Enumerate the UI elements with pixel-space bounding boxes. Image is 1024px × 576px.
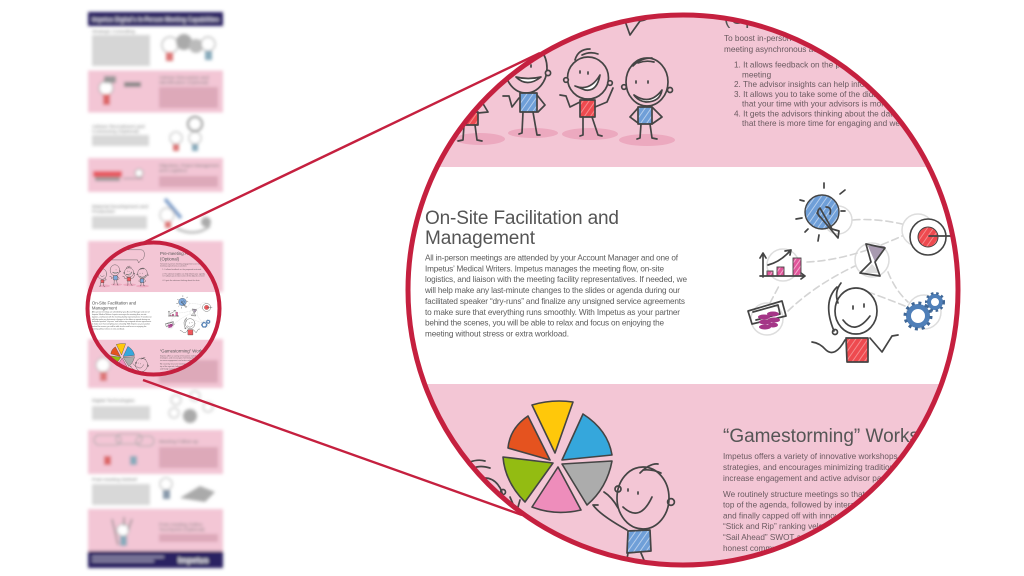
thumbnail section: workshops band [88,339,223,388]
gamestorming body text: and finally capped off with innovative exercises [723,512,893,521]
gamestorming body text: Impetus offers a variety of innovative workshops and strategies, [723,452,954,461]
illustration: dashed connectors and halos [751,206,941,335]
illustration: speech bubble [458,0,655,35]
illustration: money and coins [748,301,786,330]
thumbnail section: digital technologies [92,391,213,423]
on-site body text: All in-person meetings are attended by your Account Manager and one of [425,254,679,262]
thumbnail header bar: Impetus Digital's In-Person Meeting Capabilities [92,18,220,24]
on-site body text: Impetus’ Medical Writers. Impetus manages the meeting flow, on-site [425,264,664,273]
illustration: bar chart [760,250,805,279]
pre-meeting text block: meeting [742,70,772,80]
illustration: figure holding pie wedge [593,464,674,565]
on-site body text: meeting without stress or extra workload. [425,330,569,338]
pre-meeting text block: To boost in-person meeting engagement, we recommend [724,34,932,43]
thumbnail section: advisor discussion [88,70,223,112]
gamestorming body text [723,453,898,551]
magnified circle [408,0,1000,576]
pre-meeting text block: meeting asynchronous activities: [724,45,842,54]
large circle ring [408,15,958,565]
on-site body text: will help make any last-minute changes to the slides or agenda during our [424,286,680,295]
thumbnail section: material development: Production [92,209,115,215]
pre-meeting text block [724,20,900,128]
pre-meeting text block: that there is more time for engaging and well-thought discussion [742,119,975,128]
small circle zoomed content: meeting without stress or extra workload. [92,327,125,330]
pre-meeting text block: 2. The advisor insights can help inform your agenda [734,80,922,89]
small circle zoomed content: logistics, and liaison with the meeting facility representatives. If needed, we [92,315,152,318]
small circle zoomed content: Impetus’ Medical Writers. Impetus manages the meeting flow, on-site [92,313,146,316]
thumbnail section: pre-meeting band [88,241,223,292]
pre-meeting text block: 1. It allows feedback on the proposed materials before the [734,60,945,70]
small circle zoomed content: to make sure that everything runs smoothly. With Impetus as your partner [92,323,150,326]
small circle ring [88,242,220,374]
thumbnail section: project management [88,158,223,192]
illustration: pie chart wedges [503,401,612,512]
thumbnail section: project management: Objectives, Project Management [159,163,220,169]
pre-meeting text block: (Optional) [724,8,807,29]
heading: On-Site Facilitation and Management: Management [425,228,536,249]
thumbnail section: strategic consulting: Strategic Consulting [92,29,135,35]
heading: On-Site Facilitation and Management: On-Site Facilitation and [425,208,619,229]
small circle zoomed content: On-Site Facilitation and [92,301,137,306]
thumbnail section: strategic consulting [92,29,215,66]
small circle zoomed content: strategies, and encourages minimizing traditional lectures to [160,357,209,360]
thumbnail section: online touchpoint [88,509,223,551]
thumbnail section: online touchpoint: Post-meeting Online [159,522,203,528]
thumbnail section: meeting follow-up [88,430,223,474]
small circle zoomed content: (Optional) [160,257,180,262]
pre-meeting text block: 3. It allows you to take some of the didactic content offline so [734,90,955,99]
small circle zoomed content: “Gamestorming” Workshops [160,349,214,354]
small circle zoomed content: 1. It allows feedback on the proposed materials [162,268,201,271]
illustration: shrugging figure [812,283,898,362]
thumbnail section: material development [92,199,211,233]
small circle zoomed content: top of the agenda, followed by interactive discussion [160,365,203,368]
gamestorming body text: honest communication [723,544,805,553]
thumbnail section: online touchpoint: Touchpoint (Optional) [159,527,205,533]
small circle zoomed content: Management [92,305,118,310]
small circle zoomed content: All in-person meetings are attended by your Account Manager and one of [92,311,150,314]
small circle background [92,292,216,340]
small circle zoomed content: Pre-meeting Activities [160,251,202,256]
circle background bands [427,18,939,562]
on-site body text: logistics, and liaison with the meeting facility representatives. If needed, we [425,275,687,284]
gamestorming body text: increase engagement and active advisor participation. [723,474,919,483]
small circle zoomed content: 2. The advisor insights can help inform your agenda [162,272,206,275]
thumbnail footer with logo [88,551,223,568]
thumbnail section: material development: Material Development and [92,204,148,210]
thumbnail section: project management: and Logistics [159,168,188,174]
small circle zoomed content: meeting asynchronous activities: [160,265,187,268]
on-site body text: behind the scenes, you will be able to relax and focus on enjoying the [425,319,664,328]
small circle zoomed content [92,244,216,372]
on-site body text: facilitated speaker “dry-runs” and finalize any unsigned service agreements [425,297,685,306]
thumbnail section: post-meeting debrief [92,477,215,505]
thumbnail section: post-meeting debrief: Post-meeting Debrief [92,477,138,483]
small circle zoomed content: and finally capped off with innovative exercises [160,367,199,370]
on-site body text: to make sure that everything runs smoothly. With Impetus as your partner [425,308,680,317]
pre-meeting text block: that your time with your advisors is more interactive [742,100,929,108]
small circle zoomed content: will help make any last-minute changes to the slides or agenda during our [92,318,150,321]
illustration: hourglass [860,244,885,276]
heading: Gamestorming Workshops: “Gamestorming” Workshops [723,426,960,447]
small circle zoomed content: Impetus offers a variety of innovative workshops and strategies, [160,354,213,357]
thumbnail section: meeting follow-up: Meeting Follow-up [159,439,199,445]
thumbnail section: advisor discussion: Identification (Optional) [159,80,209,86]
thumbnail section: advisor recruitment: Contracting (Optional) [92,129,139,135]
gamestorming body text: strategies, and encourages minimizing traditional lectures to [723,463,941,472]
on-site body text [424,254,687,338]
small circle zoomed content: facilitated speaker “dry-runs” and finalize any unsigned service agreements [92,320,151,323]
blurred infographic thumbnail [88,12,223,568]
small circle zoomed content: 4. It gets the advisors thinking about the data [162,279,200,282]
small circle zoomed content: To boost in-person meeting engagement, we recommend [160,262,207,265]
thumbnail section: advisor discussion: Advisor Discussion and [159,75,209,81]
gamestorming body text: We routinely structure meetings so that key topics are at the [723,490,941,499]
gamestorming body text: “Sail Ahead” SWOT analysis [723,533,826,542]
illustration: four smiling stick figures [450,43,675,146]
illustration: target [910,219,952,255]
small focus circle on thumbnail [85,240,225,380]
illustration: partly hidden figure behind pie [470,459,521,508]
thumbnail section: digital technologies: Digital Technologies [92,398,135,404]
pre-meeting text block: 4. It gets the advisors thinking about the data to be discussed so [734,110,967,118]
connector lines between small and large circle [143,53,540,515]
thumbnail section: advisor recruitment [92,117,202,151]
illustration: lightbulb with pencil [796,183,845,241]
gamestorming body text: “Stick and Rip” ranking velcro boards [723,522,857,531]
small circle zoomed content: 3. It allows you to take some of the didactic content [162,275,205,278]
thumbnail footer with logo: Impetus [178,556,209,565]
small circle zoomed content: increase engagement and active advisor participation. [160,359,205,362]
illustrations [450,0,952,565]
heading: On-Site Facilitation and Management [425,208,619,249]
small circle zoomed content: We routinely structure meetings so that key topics are at the [160,363,209,366]
thumbnail header bar [88,12,223,26]
gamestorming body text: top of the agenda, followed by interactive discussion [723,501,913,510]
illustration: gears [905,293,944,329]
thumbnail section: advisor recruitment: Advisor Recruitment and [92,124,145,130]
small circle zoomed content: behind the scenes, you will be able to relax and focus on enjoying the [92,325,146,328]
